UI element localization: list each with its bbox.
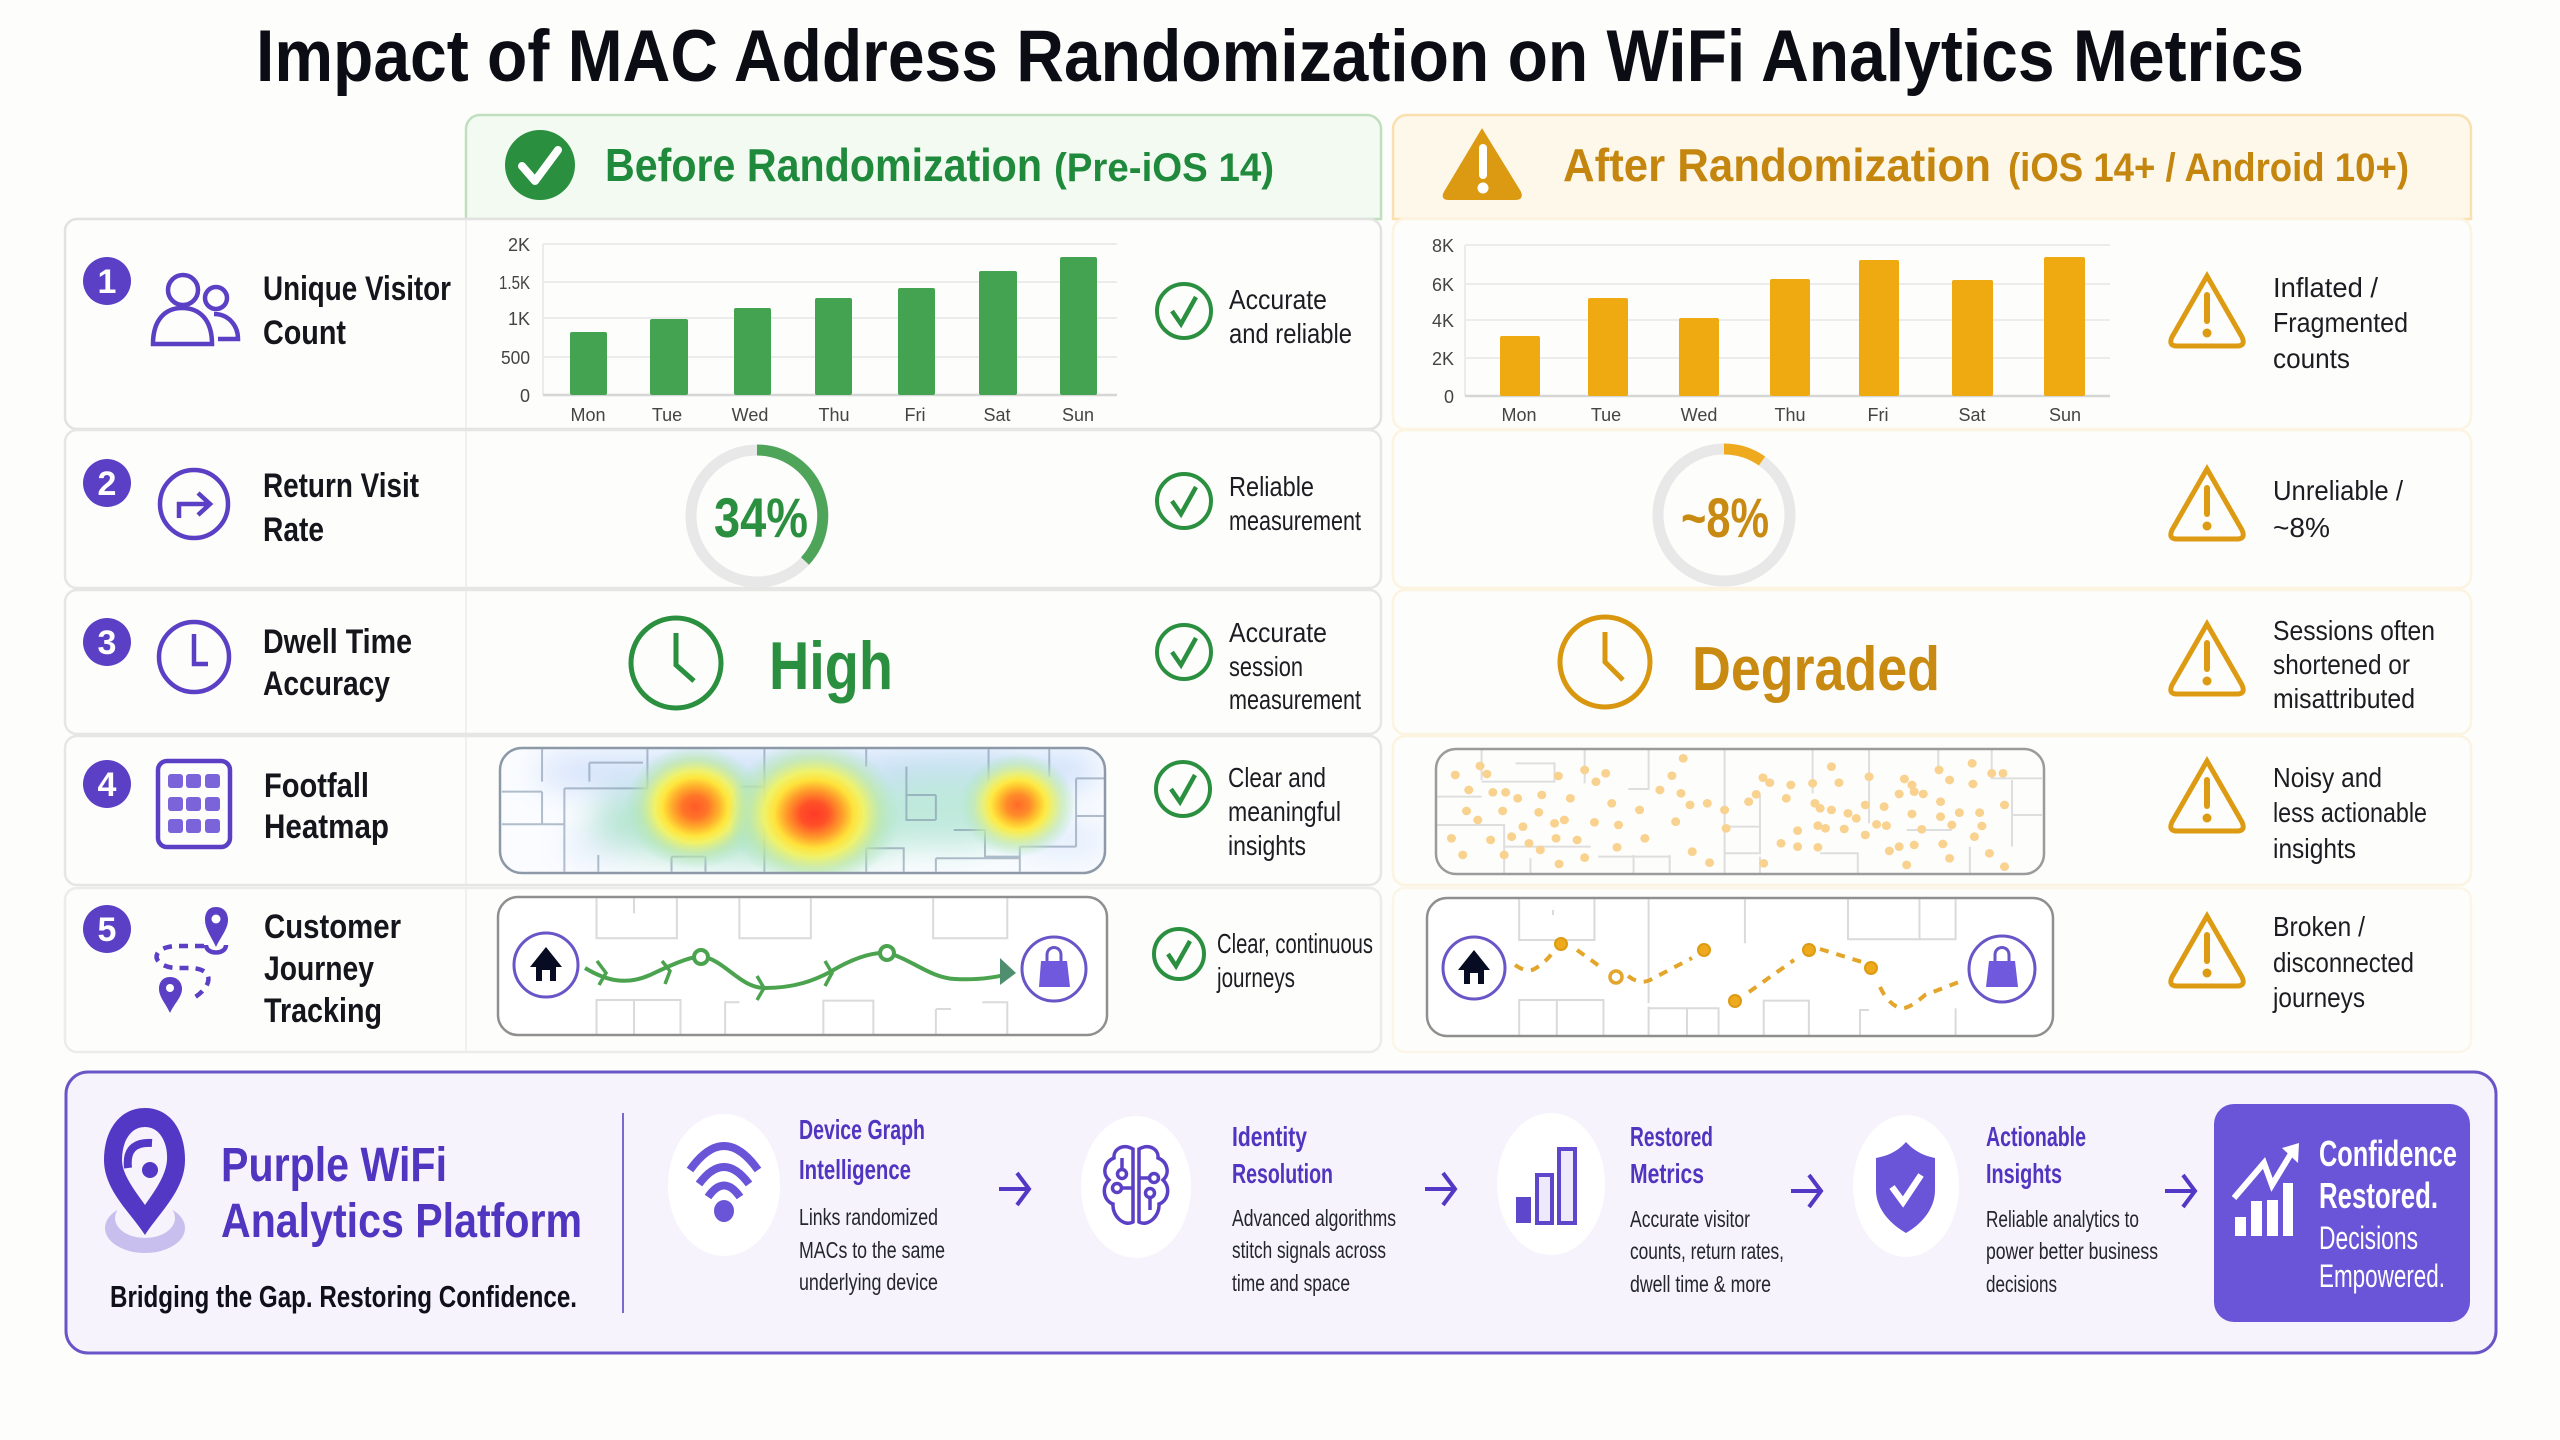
step 4: actionable insights bbox=[1853, 1115, 2158, 1297]
callout: confidence restored bbox=[2214, 1104, 2470, 1322]
bar chart: before visitors: Tue bbox=[652, 405, 682, 425]
bar chart: before visitors: Wed bbox=[732, 405, 768, 425]
number badge 2: 2 bbox=[98, 465, 116, 503]
step description bbox=[1232, 1205, 1396, 1296]
bar chart: after visitors: Fri bbox=[1868, 405, 1888, 425]
status: inflated / fragmented counts: Fragmented bbox=[2273, 307, 2408, 338]
bar chart: before visitors: 500 bbox=[501, 348, 530, 368]
bar chart: after visitors bbox=[1432, 236, 2110, 425]
step title: Intelligence bbox=[799, 1154, 911, 1185]
status: broken journeys bbox=[2171, 911, 2414, 1013]
bar chart: before visitors: 2K bbox=[508, 235, 530, 255]
bar chart: before visitors bbox=[499, 235, 1117, 425]
label: customer journey tracking: Customer bbox=[264, 908, 401, 946]
step description: Links randomized bbox=[799, 1204, 938, 1230]
icon: home bbox=[514, 933, 578, 997]
number badge 1 bbox=[83, 257, 131, 305]
bar chart: after visitors: 8K bbox=[1432, 236, 1454, 256]
bar chart: before visitors: Sat bbox=[983, 405, 1011, 425]
status: sessions shortened: shortened or bbox=[2273, 649, 2410, 680]
step description: Reliable analytics to bbox=[1986, 1206, 2139, 1232]
label: customer journey tracking: Tracking bbox=[264, 992, 382, 1030]
step description bbox=[799, 1204, 945, 1295]
icon: brain bbox=[1104, 1147, 1168, 1223]
donut: about 8 percent: ~8% bbox=[1681, 486, 1769, 549]
bar chart: before visitors: Fri bbox=[904, 405, 926, 425]
bar chart: after visitors: Thu bbox=[1774, 405, 1806, 425]
status: unreliable about 8 percent: Unreliable / bbox=[2273, 475, 2403, 506]
callout text: Empowered. bbox=[2319, 1258, 2445, 1294]
status: accurate session measurement: session bbox=[1229, 651, 1303, 682]
row 2 after: unreliable bbox=[1393, 430, 2471, 588]
status: reliable measurement: measurement bbox=[1229, 505, 1361, 536]
label: footfall heatmap bbox=[264, 767, 389, 846]
status: broken journeys: journeys bbox=[2272, 982, 2365, 1013]
status: clear and meaningful insights: meaningful bbox=[1228, 796, 1341, 827]
status: inflated / fragmented counts bbox=[2171, 272, 2408, 374]
step title: Resolution bbox=[1232, 1158, 1333, 1189]
step description: counts, return rates, bbox=[1630, 1238, 1784, 1264]
icon: journey pins bbox=[157, 907, 228, 1013]
status: reliable measurement bbox=[1157, 471, 1361, 536]
label: footfall heatmap: Heatmap bbox=[264, 808, 389, 846]
bar chart: before visitors: 0 bbox=[520, 386, 530, 406]
status: noisy insights: insights bbox=[2273, 833, 2356, 864]
icon: return arrow bbox=[160, 470, 228, 538]
row 3 after: degraded bbox=[1393, 590, 2471, 734]
after heading bbox=[1563, 139, 2409, 191]
panel: purple wifi analytics platform bbox=[66, 1072, 2496, 1353]
label: return visit rate bbox=[263, 467, 419, 549]
status: sessions shortened: Sessions often bbox=[2273, 615, 2435, 646]
status: clear and meaningful insights: insights bbox=[1228, 830, 1306, 861]
status: accurate and reliable: and reliable bbox=[1229, 318, 1352, 349]
status: sessions shortened bbox=[2171, 615, 2435, 714]
row 3: dwell time accuracy bbox=[65, 590, 1381, 734]
label: customer journey tracking: Journey bbox=[264, 950, 374, 988]
bar chart: after visitors: 6K bbox=[1432, 275, 1454, 295]
title: Impact of MAC Address Randomization on WiFi Analytics Metrics bbox=[256, 16, 2304, 97]
donut: 34 percent bbox=[691, 450, 823, 582]
status: noisy insights: less actionable bbox=[2273, 797, 2427, 828]
icon: amber warning triangle bbox=[1444, 130, 1521, 199]
step description: Accurate visitor bbox=[1630, 1206, 1750, 1232]
bar chart: after visitors: 4K bbox=[1432, 311, 1454, 331]
number badge 5 bbox=[83, 905, 131, 953]
step 2: identity resolution bbox=[1081, 1116, 1396, 1296]
step description: time and space bbox=[1232, 1270, 1350, 1296]
step title bbox=[1986, 1121, 2086, 1189]
value: high with clock: High bbox=[769, 628, 893, 704]
icon: wifi bbox=[690, 1146, 758, 1220]
status: unreliable about 8 percent: ~8% bbox=[2273, 512, 2330, 543]
number badge 4: 4 bbox=[98, 766, 117, 804]
icon: rising chart bbox=[2234, 1143, 2299, 1236]
label: dwell time accuracy: Dwell Time bbox=[263, 623, 412, 661]
bar chart: after visitors: Sun bbox=[2049, 405, 2081, 425]
after heading: After Randomization bbox=[1563, 139, 1991, 191]
before heading: Before Randomization bbox=[605, 139, 1042, 191]
label: unique visitor count: Count bbox=[263, 314, 346, 352]
row 1: unique visitor count bbox=[65, 219, 1381, 429]
icon: shopping bag bbox=[1022, 937, 1086, 1001]
after heading: (iOS 14+ / Android 10+) bbox=[2008, 146, 2409, 190]
label: unique visitor count: Unique Visitor bbox=[263, 270, 451, 308]
journey map: broken path bbox=[1427, 898, 2053, 1036]
donut: 34 percent: 34% bbox=[714, 486, 808, 549]
bar chart: after visitors: 0 bbox=[1444, 387, 1454, 407]
bar chart: before visitors: 1K bbox=[508, 309, 530, 329]
row 5 after: broken journeys bbox=[1393, 888, 2471, 1052]
arrow bbox=[1791, 1175, 1821, 1207]
icon: purple location pin logo bbox=[104, 1108, 185, 1253]
step 1: device graph intelligence bbox=[668, 1114, 945, 1295]
icon: shopping bag bbox=[1969, 936, 2035, 1002]
status: accurate session measurement: measurement bbox=[1229, 684, 1361, 715]
step description: Advanced algorithms bbox=[1232, 1205, 1396, 1231]
number badge 1: 1 bbox=[98, 263, 116, 301]
icon: users bbox=[153, 275, 238, 344]
platform name: Analytics Platform bbox=[221, 1195, 582, 1248]
icon: grid bbox=[158, 761, 230, 847]
step title: Actionable bbox=[1986, 1121, 2086, 1152]
status: unreliable about 8 percent bbox=[2171, 469, 2403, 543]
icon: shield check bbox=[1876, 1142, 1935, 1233]
label: return visit rate: Rate bbox=[263, 511, 324, 549]
number badge 2 bbox=[83, 459, 131, 507]
step description: stitch signals across bbox=[1232, 1237, 1386, 1263]
value: degraded with clock bbox=[1560, 617, 1940, 707]
status: clear and meaningful insights: Clear and bbox=[1228, 762, 1326, 793]
step description: underlying device bbox=[799, 1269, 938, 1295]
value: degraded with clock: Degraded bbox=[1692, 635, 1940, 704]
donut: about 8 percent bbox=[1658, 449, 1790, 581]
status: clear continuous journeys bbox=[1154, 928, 1373, 993]
step title: Restored bbox=[1630, 1121, 1713, 1152]
label: footfall heatmap: Footfall bbox=[264, 767, 369, 805]
platform name bbox=[221, 1139, 582, 1248]
status: noisy insights: Noisy and bbox=[2273, 762, 2382, 793]
status: accurate and reliable: Accurate bbox=[1229, 284, 1327, 315]
status: accurate session measurement: Accurate bbox=[1229, 617, 1327, 648]
icon: bar chart bbox=[1516, 1149, 1575, 1223]
status: inflated / fragmented counts: Inflated / bbox=[2273, 272, 2378, 303]
step title bbox=[1232, 1121, 1333, 1189]
status: sessions shortened: misattributed bbox=[2273, 683, 2415, 714]
arrow bbox=[1425, 1173, 1455, 1205]
label: dwell time accuracy: Accuracy bbox=[263, 665, 390, 703]
journey map: continuous path bbox=[498, 897, 1107, 1035]
callout text: Restored. bbox=[2319, 1175, 2438, 1216]
step title bbox=[799, 1114, 925, 1185]
status: reliable measurement: Reliable bbox=[1229, 471, 1314, 502]
label: customer journey tracking bbox=[264, 908, 401, 1030]
step description: power better business bbox=[1986, 1238, 2158, 1264]
step 3: restored metrics bbox=[1497, 1113, 1784, 1297]
bar chart: before visitors: Mon bbox=[570, 405, 606, 425]
bar chart: after visitors: Sat bbox=[1958, 405, 1986, 425]
before heading: (Pre-iOS 14) bbox=[1054, 146, 1274, 190]
status: noisy insights bbox=[2171, 761, 2427, 864]
platform name: Purple WiFi bbox=[221, 1139, 447, 1192]
number badge 4 bbox=[83, 760, 131, 808]
step description bbox=[1630, 1206, 1784, 1297]
bar chart: after visitors: Wed bbox=[1681, 405, 1717, 425]
icon: home bbox=[1443, 937, 1505, 999]
bar chart: after visitors: 2K bbox=[1432, 349, 1454, 369]
step title: Device Graph bbox=[799, 1114, 925, 1145]
bar chart: before visitors: 1.5K bbox=[499, 273, 530, 293]
status: broken journeys: Broken / bbox=[2273, 911, 2365, 942]
panel: before randomization header bbox=[466, 115, 1381, 219]
bar chart: after visitors: Mon bbox=[1501, 405, 1537, 425]
status: clear continuous journeys: journeys bbox=[1216, 962, 1295, 993]
row 4 after: noisy heatmap bbox=[1393, 736, 2471, 885]
heatmap: scattered noisy dots bbox=[1436, 749, 2044, 874]
step description: MACs to the same bbox=[799, 1237, 945, 1263]
label: unique visitor count bbox=[263, 270, 451, 352]
arrow bbox=[999, 1173, 1029, 1205]
status: clear continuous journeys: Clear, continuous bbox=[1217, 928, 1373, 959]
step title: Insights bbox=[1986, 1158, 2062, 1189]
callout text bbox=[2319, 1133, 2457, 1294]
bar chart: before visitors: Sun bbox=[1062, 405, 1094, 425]
status: broken journeys: disconnected bbox=[2273, 947, 2414, 978]
heatmap: clear clusters bbox=[498, 746, 1106, 874]
bar chart: after visitors: Tue bbox=[1591, 405, 1621, 425]
label: dwell time accuracy bbox=[263, 623, 412, 703]
row 5: customer journey tracking bbox=[65, 888, 1381, 1052]
value: high with clock bbox=[631, 618, 893, 708]
step description: dwell time & more bbox=[1630, 1271, 1771, 1297]
row 2: return visit rate bbox=[65, 430, 1381, 588]
tagline: Bridging the Gap. Restoring Confidence. bbox=[110, 1279, 577, 1314]
arrow bbox=[2165, 1175, 2195, 1207]
row 1 after: inflated counts bbox=[1393, 219, 2471, 429]
step title: Identity bbox=[1232, 1121, 1307, 1152]
number badge 3: 3 bbox=[98, 624, 116, 662]
status: accurate and reliable bbox=[1157, 284, 1352, 349]
step title bbox=[1630, 1121, 1713, 1189]
callout text: Decisions bbox=[2319, 1220, 2418, 1256]
row 4: footfall heatmap bbox=[65, 736, 1381, 888]
status: clear and meaningful insights bbox=[1156, 762, 1341, 861]
step description bbox=[1986, 1206, 2158, 1297]
step title: Metrics bbox=[1630, 1158, 1704, 1189]
status: accurate session measurement bbox=[1157, 617, 1361, 715]
step description: decisions bbox=[1986, 1271, 2057, 1297]
status: inflated / fragmented counts: counts bbox=[2273, 343, 2350, 374]
number badge 5: 5 bbox=[98, 911, 116, 949]
icon: clock bbox=[159, 622, 229, 692]
panel: after randomization header bbox=[1393, 115, 2471, 219]
number badge 3 bbox=[83, 618, 131, 666]
icon: green check badge bbox=[505, 130, 575, 200]
bar chart: before visitors: Thu bbox=[818, 405, 850, 425]
callout text: Confidence bbox=[2319, 1133, 2457, 1174]
label: return visit rate: Return Visit bbox=[263, 467, 419, 505]
